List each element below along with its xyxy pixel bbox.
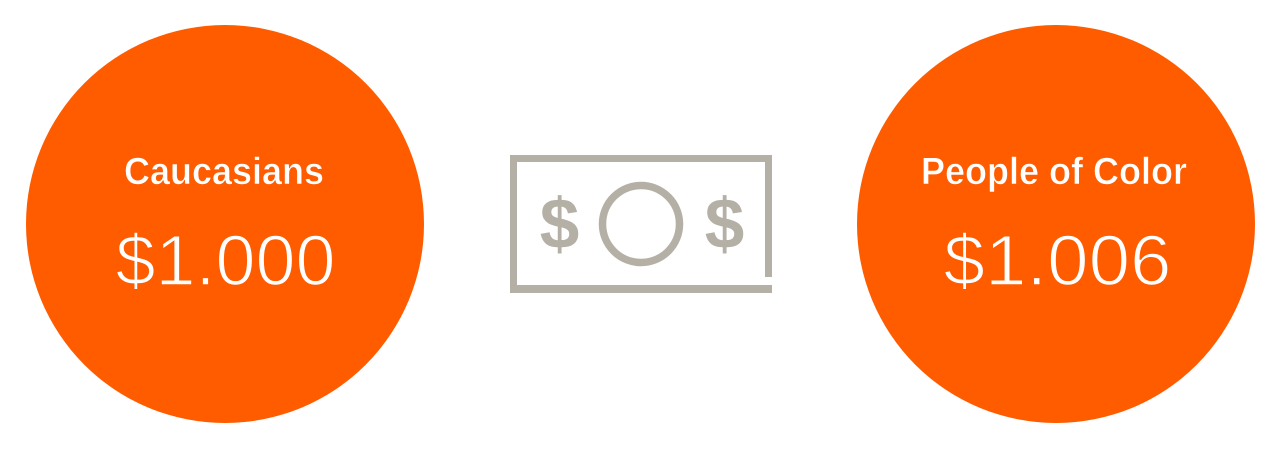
bill outline (510, 155, 772, 293)
label: People of Color: People of Color (921, 151, 1187, 193)
right dollar sign: $ (705, 185, 744, 264)
bill centre circle (602, 186, 680, 262)
circle: People of Color background (857, 25, 1255, 423)
circle: Caucasians background (26, 25, 424, 423)
value: People of Color amount: $1.006 (944, 222, 1172, 301)
panel: People of Color (857, 25, 1255, 423)
value: Caucasians amount: $1.000 (116, 222, 336, 301)
icon: dollar bill (510, 155, 772, 293)
panel: Caucasians (26, 25, 424, 423)
label: Caucasians: Caucasians (124, 151, 324, 193)
left dollar sign: $ (540, 185, 579, 264)
